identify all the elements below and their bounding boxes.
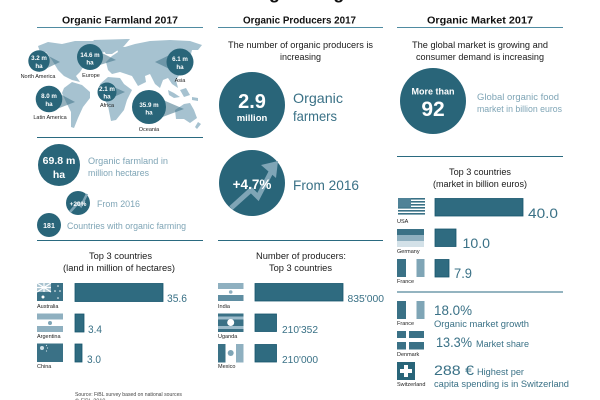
- bar chart: land by country: Australia: [37, 304, 59, 310]
- world map with regional bubbles: ha: [45, 101, 53, 108]
- bar chart: market by country: Germany: [397, 249, 420, 255]
- stat: 2.9 million farmers: million: [237, 113, 267, 124]
- heading: top 3 countries land: Top 3 countries: [89, 251, 153, 261]
- stat: 2.9 million farmers: 2.9: [238, 91, 266, 113]
- stat: +4.7% from 2016 with arrow: From 2016: [293, 177, 359, 193]
- bar chart: producers by country: India: [218, 304, 231, 310]
- stat: +20% from 2016: +20%: [70, 201, 87, 208]
- stat: 181 countries: Countries with organic farming: [67, 221, 186, 231]
- heading: top 3 countries land: (land in million of hectares): [63, 263, 175, 273]
- stat: France market growth: [397, 301, 529, 330]
- bar chart: market by country: USA: [397, 219, 409, 225]
- bar chart: land by country: China: [37, 364, 52, 370]
- subtitle: market: The global market is growing and: [412, 40, 548, 50]
- world map with regional bubbles: ha: [176, 64, 184, 71]
- world map with regional bubbles: Oceania: [139, 127, 160, 133]
- world map with regional bubbles: 35.9 m: [139, 102, 159, 109]
- stat: 2.9 million farmers: [219, 72, 343, 138]
- world map with regional bubbles: 3.2 m: [31, 55, 47, 62]
- stat: 69.8 m ha farmland: 69.8 m: [43, 155, 75, 167]
- stat: 2.9 million farmers: Organic: [293, 90, 343, 106]
- world map with regional bubbles: [21, 39, 202, 133]
- world map with regional bubbles: 2.1 m: [99, 86, 115, 93]
- world map with regional bubbles: ha: [103, 94, 111, 100]
- stat: 69.8 m ha farmland: million hectares: [88, 168, 149, 178]
- stat: +4.7% from 2016 with arrow: [219, 150, 359, 216]
- stat: France market growth: 18.0%: [434, 302, 472, 318]
- world map with regional bubbles: Africa: [100, 103, 115, 109]
- stat: 69.8 m ha farmland: ha: [53, 169, 65, 181]
- world map with regional bubbles: 8.0 m: [41, 93, 57, 100]
- world map with regional bubbles: Europe: [82, 73, 100, 79]
- stat: 69.8 m ha farmland: Organic farmland in: [88, 156, 168, 166]
- bar chart: producers by country: 210'352: [282, 325, 318, 336]
- stat: Denmark market share: Market share: [476, 339, 529, 350]
- bar chart: market by country: 7.9: [454, 265, 472, 281]
- stat: Denmark market share: 13.3%: [436, 334, 472, 350]
- stat: Denmark market share: [397, 331, 529, 358]
- panel: organic market: [397, 16, 569, 390]
- bar chart: land by country: 3.0: [87, 354, 101, 366]
- source note: Source: FiBL survey based on national sources: [75, 392, 182, 398]
- stat: more than 92: 92: [421, 98, 445, 121]
- heading: organic market: Organic Market 2017: [427, 16, 533, 26]
- stat: Switzerland per capita spending: Switzerland: [397, 382, 425, 388]
- heading: number of producers: [256, 251, 346, 273]
- stat: France market growth: France: [397, 321, 414, 327]
- stat: Switzerland per capita spending: 288 €: [434, 362, 474, 378]
- world map with regional bubbles: ha: [86, 60, 94, 66]
- heading: number of producers: Number of producers:: [256, 251, 346, 261]
- stat: Switzerland per capita spending: Highest per: [477, 367, 524, 378]
- stat: 181 countries: [37, 213, 186, 237]
- stat: more than 92: More than: [411, 86, 455, 96]
- heading: top 3 countries market: [433, 167, 527, 189]
- world map with regional bubbles: Asia: [175, 78, 186, 84]
- stat: 181 countries: 181: [43, 223, 55, 230]
- bar chart: market by country: 40.0: [528, 205, 558, 221]
- world map with regional bubbles: ha: [145, 110, 153, 116]
- panel: organic farmland: [21, 16, 203, 400]
- bar chart: market by country: France: [397, 279, 414, 285]
- heading: organic farmland: Organic Farmland 2017: [62, 16, 178, 26]
- bar chart: producers by country: [218, 283, 384, 370]
- stat: Denmark market share: Denmark: [397, 352, 420, 358]
- world map with regional bubbles: 14.6 m: [80, 52, 100, 59]
- bar chart: land by country: Argentina: [37, 334, 61, 340]
- bar chart: market by country: [397, 198, 558, 285]
- subtitle: producers: The number of organic producers is: [228, 40, 374, 50]
- world map with regional bubbles: 6.1 m: [172, 56, 188, 63]
- bar chart: producers by country: Mexico: [218, 364, 235, 370]
- subtitle: market: consumer demand is increasing: [416, 52, 544, 62]
- stat: more than 92: market in billion euros: [477, 104, 562, 114]
- heading: organic producers: Organic Producers 2017: [243, 16, 356, 26]
- bar chart: producers by country: Uganda: [218, 334, 238, 340]
- stat: Switzerland per capita spending: capita spending is in Switzerland: [434, 379, 569, 390]
- world map with regional bubbles: North America: [21, 74, 56, 80]
- stat: 2.9 million farmers: farmers: [293, 108, 337, 124]
- heading: number of producers: Top 3 countries: [269, 263, 333, 273]
- stat: France market growth: Organic market growth: [434, 319, 529, 330]
- bar chart: producers by country: 835'000: [348, 294, 384, 305]
- stat: 69.8 m ha farmland: [38, 144, 168, 186]
- heading: top 3 countries market: Top 3 countries: [449, 167, 511, 177]
- subtitle: producers: [228, 40, 374, 62]
- stat: more than 92: Global organic food: [477, 92, 559, 102]
- subtitle: producers: increasing: [280, 52, 321, 62]
- stat: +20% from 2016: [66, 191, 140, 215]
- subtitle: market: [412, 40, 548, 62]
- heading: top 3 countries market: (market in billion euros): [433, 179, 527, 189]
- stat: +20% from 2016: From 2016: [97, 199, 140, 209]
- bar chart: land by country: 3.4: [88, 324, 102, 336]
- bar chart: market by country: 10.0: [462, 235, 490, 251]
- panel: organic producers: [218, 16, 384, 370]
- world map with regional bubbles: ha: [35, 63, 43, 70]
- bar chart: land by country: [37, 283, 187, 370]
- bar chart: land by country: 35.6: [167, 293, 187, 305]
- stat: more than 92: [400, 68, 562, 134]
- heading: top 3 countries land: [63, 251, 175, 273]
- bar chart: producers by country: 210'000: [282, 355, 318, 366]
- world map with regional bubbles: Latin America: [33, 115, 68, 121]
- stat: Switzerland per capita spending: [397, 362, 569, 390]
- stat: +4.7% from 2016 with arrow: +4.7%: [233, 177, 271, 192]
